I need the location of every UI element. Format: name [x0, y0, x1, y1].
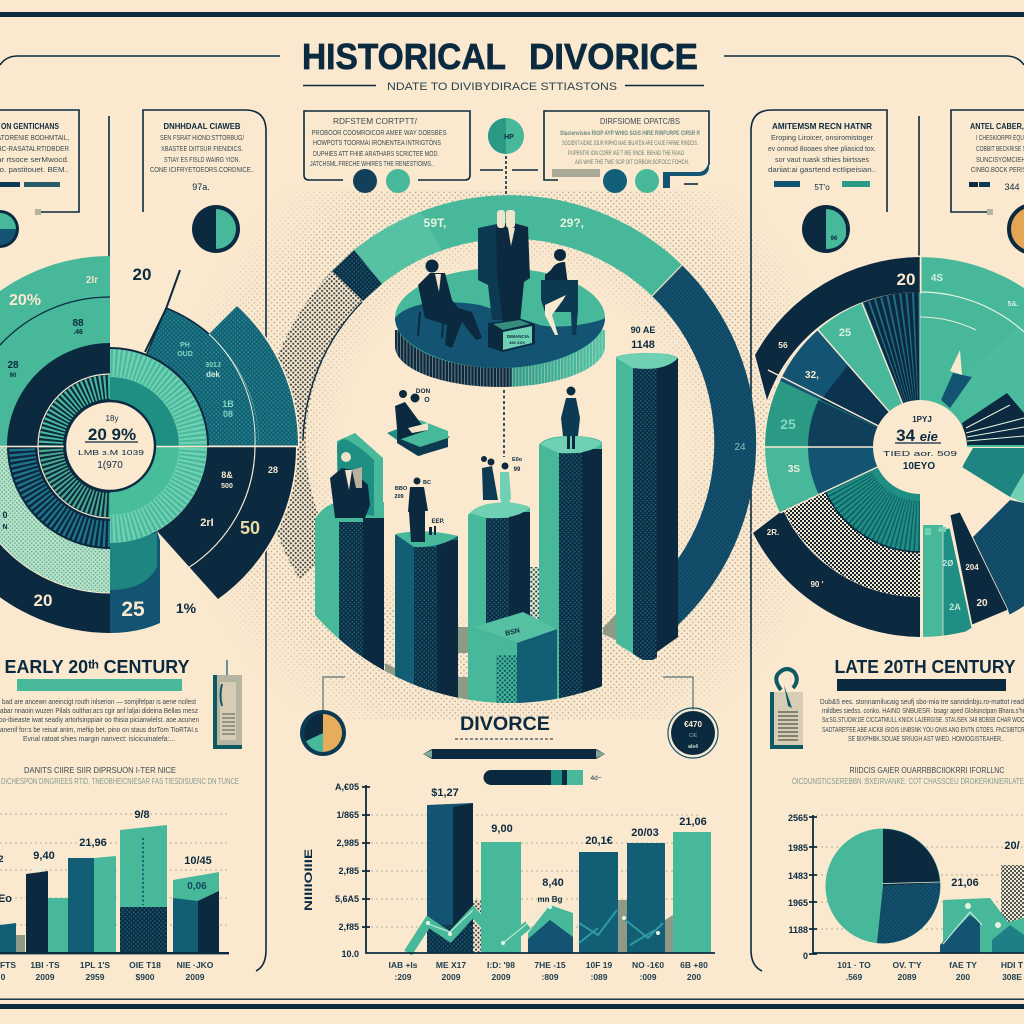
- x axis labels: fAE TY: [949, 960, 977, 970]
- value labels: 20/: [1004, 840, 1020, 852]
- x axis labels: $900: [136, 972, 155, 982]
- x axis labels: OIE T18: [129, 960, 161, 970]
- y axis labels: 5,6A5: [335, 894, 359, 904]
- panel: system context box: JATCHSML.FRECHE WHIRES THE RENESTIOIMS..: [310, 161, 434, 168]
- panel: individual causes box: 97a.: [192, 182, 210, 192]
- chart: 3d bars: [315, 353, 678, 727]
- chart center label: [873, 400, 967, 494]
- y axis labels: 10.0: [341, 949, 359, 959]
- x axis labels: ME X17: [436, 960, 466, 970]
- panel: diverse opinions box: [544, 111, 709, 193]
- bars: [427, 803, 711, 953]
- y axis labels: 0: [803, 951, 808, 961]
- figure: seated man: [418, 260, 482, 348]
- chart value labels: 204: [965, 563, 979, 572]
- y axis title: NIIIIOIIIE: [303, 849, 315, 911]
- chart value labels: 301J: [205, 362, 221, 369]
- x axis labels: [388, 960, 708, 982]
- section heading: late 20th century: LATE 20TH CENTURY: [834, 657, 1016, 677]
- subheading: early chart: DICHESPON DINGRIEES RTID, TNEOBHEICNIESAR FAS TIESDISUENC DN TUNCE: [1, 776, 239, 786]
- icon: green dot: [386, 169, 410, 193]
- value labels: 21,06: [951, 877, 979, 889]
- chart value labels: 25: [839, 327, 851, 339]
- chart value labels: 500: [221, 483, 233, 490]
- chart value labels: .46: [73, 329, 83, 336]
- chart: left radial chart early century: [0, 256, 300, 636]
- panel: amendment box: ev onmod 8ooaes shee pliasicd tox.: [768, 146, 876, 153]
- icon: medallion: €470: [684, 720, 702, 729]
- y axis labels: 2,f85: [338, 922, 359, 932]
- value labels: 21,96: [79, 837, 107, 849]
- x axis labels: 7HE -15: [534, 960, 566, 970]
- chart value labels: 25: [121, 598, 145, 621]
- panel: individual causes box: XBASTEE DIITSUR FIENIDICS.: [161, 146, 243, 153]
- x axis labels: 2009: [492, 972, 511, 982]
- x axis labels: 200: [956, 972, 970, 982]
- icon: tagged document: [770, 669, 803, 749]
- value labels: 0,06: [187, 881, 207, 892]
- text block: early century: bad are ancewn aneincigt routh inlserion — somjifelpar is aene ncilest: [2, 699, 196, 706]
- text block: late century: [820, 699, 1024, 743]
- chart center label: 20 9%: [88, 425, 136, 444]
- chart center label: 18y: [106, 414, 118, 423]
- panel: system context box: HOWPOTS TOORMAI IRONENTEA INTRIGTÖNS: [313, 139, 441, 147]
- icon: medallion: als4: [688, 744, 698, 750]
- chart value labels: 2rI: [200, 517, 214, 529]
- illustration: reader on books: [387, 388, 450, 456]
- y axis labels: 1/865: [336, 810, 359, 820]
- chart value labels: dek: [206, 370, 220, 379]
- chart center label: 34 eie: [896, 426, 938, 445]
- trend lines: [408, 905, 663, 953]
- x axis labels: I:D: '98: [487, 960, 515, 970]
- x axis labels: OV. T'Y: [892, 960, 922, 970]
- panel: amendment box: 5T'o: [814, 183, 830, 192]
- icon: dagger shape: [941, 350, 972, 408]
- chart value labels: 20: [897, 270, 915, 289]
- chart value labels: 88: [72, 318, 84, 329]
- icon: navy dot: [353, 169, 377, 193]
- chart center label: TIED aor. 509: [883, 449, 957, 458]
- x axis labels: NIE ·JKO: [177, 960, 214, 970]
- value labels: 10/45: [184, 855, 212, 867]
- chart center label: LMB ɜ.M 1039: [78, 448, 144, 457]
- chart value labels: 28: [268, 465, 278, 475]
- panel: amendment box: Eroping Liroicer, onsiromistoger: [771, 135, 874, 142]
- icon: document box: 383 XXX: [509, 340, 525, 345]
- x axis labels: 101 · TO: [837, 960, 871, 970]
- icon: medallion: [663, 677, 718, 758]
- label: bar 5 value: 1148: [631, 339, 655, 351]
- figure on bar 2: 209: [394, 494, 404, 500]
- panel: left system box: [0, 110, 79, 248]
- y axis labels: 1483: [788, 871, 808, 881]
- heading: divorce: [423, 713, 605, 759]
- chart value labels: 32,: [805, 370, 819, 381]
- x axis labels: 2009: [442, 972, 461, 982]
- bar 4: [539, 436, 602, 720]
- pie chart: [826, 828, 940, 944]
- figure on bar 2: EEP.: [432, 519, 445, 525]
- subheading: early chart: [1, 765, 239, 786]
- chart: central bar chart: [303, 782, 715, 982]
- figure on bar 4: [561, 386, 580, 449]
- value labels: [431, 787, 707, 904]
- value labels: mn Bg: [538, 895, 563, 904]
- cube: BSN: [505, 627, 521, 638]
- x axis labels: NO -1€0: [632, 960, 664, 970]
- chart center label: 10EYO: [903, 461, 935, 472]
- icon: pie: [192, 205, 240, 253]
- section heading: early 20th century: [4, 657, 190, 691]
- illustration: reader on books: DON: [416, 388, 431, 395]
- panel: system context box: [304, 111, 470, 193]
- chart value labels: 20%: [9, 292, 41, 309]
- figure on bar 2: BC: [423, 480, 431, 486]
- chart value labels: 20: [976, 598, 988, 609]
- y axis labels: 2,f85: [338, 866, 359, 876]
- icon: document left: [213, 660, 242, 749]
- panel: individual causes box: DNHHDAAL CIAWEB: [164, 121, 240, 131]
- chart: late mixed chart: [788, 813, 1024, 982]
- value labels: $1,27: [431, 787, 459, 799]
- value labels: 9,00: [491, 823, 513, 835]
- icon: small pie: [0, 210, 19, 248]
- figure on bar 2: [394, 478, 445, 542]
- x axis labels: 10F 19: [586, 960, 613, 970]
- chart: central ring: 59T,: [424, 216, 446, 230]
- wedge bars: [923, 512, 1008, 640]
- x axis labels: 1PL 1'S: [80, 960, 110, 970]
- icon: small pie chart: [300, 677, 346, 756]
- icon: document box: DIMANCIA: [507, 334, 530, 339]
- title: HISTORICAL: [302, 36, 506, 77]
- icon: central badge: HP: [504, 134, 514, 141]
- panel: system context box: RDFSTEM CORTPTT/: [333, 116, 418, 126]
- subtitle: NDATE TO DIVIBYDIRACE STTIASTONS: [387, 81, 617, 93]
- chart: central ring: [261, 195, 756, 647]
- x axis labels: 2009: [186, 972, 205, 982]
- value labels: 9,40: [33, 850, 55, 862]
- illustration: reader on books: O: [424, 397, 430, 404]
- legend pill: [484, 770, 602, 785]
- panel: system context box: DUPHIES ATT FHIIE ARATHARS SCRICTEE MOD.: [313, 151, 439, 158]
- background halftone: [200, 190, 807, 720]
- couple on bar 3: E0o: [512, 457, 523, 463]
- chart value labels: 28: [7, 360, 19, 371]
- y axis labels: 1965: [788, 898, 808, 908]
- bar 2: [395, 532, 458, 698]
- figure: seated woman: [541, 249, 578, 335]
- x axis labels: IAB +Is: [388, 960, 418, 970]
- section heading: early 20th century: EARLY 20ᵗʰ CENTURY: [4, 657, 190, 677]
- value labels: 21,06: [679, 816, 707, 828]
- bar 1: [315, 502, 384, 670]
- heading: divorce: DIVORCE: [460, 713, 550, 735]
- cube: [474, 612, 557, 710]
- text block: early century: oo-ibieaste iwat seadiy artorlsinppiair oo thisia picianwlelst. aoe.acunen: [0, 717, 199, 724]
- chart value labels: 3S: [788, 464, 800, 475]
- value labels: [951, 840, 1020, 889]
- y axis labels: 1985: [788, 843, 808, 853]
- value labels: [0, 809, 212, 905]
- text block: early century: [0, 699, 199, 743]
- chart value labels: 2Ø: [943, 559, 953, 568]
- panel: amendment box: [751, 110, 887, 971]
- couple on bar 3: 99: [514, 467, 521, 473]
- x axis labels: 2009: [36, 972, 55, 982]
- section heading: late 20th century: [834, 657, 1016, 691]
- panel: antel career box: 344: [1004, 182, 1020, 192]
- chart value labels: 1B: [222, 399, 234, 409]
- figures: two standing men: [478, 210, 530, 323]
- icon: document box: [488, 319, 535, 352]
- chart center label: 1(970: [97, 460, 123, 471]
- couple on bar 3: [481, 456, 523, 508]
- chart: central ring: 29?,: [560, 216, 584, 230]
- chart value labels: 20: [133, 265, 151, 284]
- chart center label: 1PYJ: [912, 415, 932, 424]
- chart value labels: 0: [2, 510, 8, 520]
- value labels: 8,40: [542, 877, 564, 889]
- central dashed connector: [503, 390, 505, 457]
- subheading: early chart: DANITS CIIRE SIIR DIPRSUON I-TER NICE: [24, 765, 176, 775]
- panel: individual causes box: [143, 110, 266, 971]
- y axis labels: 1188: [788, 925, 808, 935]
- chart value labels: 2R.: [767, 528, 779, 537]
- chart value labels: OUD: [177, 351, 193, 358]
- illustration: book figure on bar 1: [330, 433, 383, 518]
- x axis labels: HDI T: [1001, 960, 1024, 970]
- illustration: platform with figures: [395, 210, 605, 387]
- legend pill: 4d−: [590, 775, 602, 782]
- panel: left system box: ON GENTICHANS: [1, 122, 60, 131]
- title rules: [0, 56, 1024, 86]
- x axis labels: 1BI ·TS: [30, 960, 60, 970]
- panel: individual causes box: STIAY ES FISLD WAIRG YION.: [164, 157, 240, 164]
- x axis labels: 308E: [1002, 972, 1022, 982]
- text block: early century: anenif for:s be reisat anim, mefiip bet. pino on staus dsrTom TioRTAI.s: [0, 727, 198, 734]
- x axis labels: :009: [639, 972, 657, 982]
- subheading: late chart: [792, 765, 1024, 786]
- y axis labels: 2,985: [336, 838, 359, 848]
- bar 5: [616, 353, 678, 660]
- panel: diverse opinions box: DIRFSIOME OPATC/BS: [600, 116, 680, 126]
- panel: amendment box: sor vaut ruask sthies biirtsses: [775, 157, 870, 164]
- icon: connector: [987, 209, 993, 215]
- value labels: 20,1€: [585, 835, 613, 847]
- panel: amendment box: AMITEMSM RECN HATNR: [772, 121, 872, 131]
- divider line left: [108, 116, 110, 345]
- x axis labels: 2959: [86, 972, 105, 982]
- x axis labels: 0: [1, 972, 6, 982]
- chart value labels: 2Ir: [86, 275, 98, 286]
- x axis labels: :089: [590, 972, 608, 982]
- panel: amendment box: dariiat:ai gasrtend ectIipeisian..: [768, 167, 876, 174]
- x axis labels: :209: [394, 972, 412, 982]
- label: bar 5 value: [631, 325, 655, 351]
- chart value labels: 25: [780, 416, 796, 432]
- title: [302, 36, 698, 77]
- divider line right: [918, 116, 920, 257]
- bar 3: [468, 502, 530, 720]
- x axis labels: 6B +80: [680, 960, 708, 970]
- panel: diverse opinions box: SOCIENT AIDNE JOUR RIPHO MAE IBUATEN ARE CAUE FARME RINDCIS.: [562, 141, 698, 147]
- chart value labels: [767, 270, 1018, 612]
- chart value labels: 90: [10, 373, 17, 379]
- chart: central ring: 24: [734, 442, 746, 453]
- icon: medallion: CIE: [689, 733, 698, 739]
- area series: [940, 865, 1024, 953]
- chart value labels: 90 ': [810, 580, 824, 589]
- panel: diverse opinions box: Stacienvisies RIOP AYP WHIG SOIS HIRE RINFURPE CIR5R R: [560, 131, 701, 137]
- chart: right radial chart late century: [753, 257, 1024, 640]
- icon: pie: [802, 205, 850, 253]
- chart value labels: 1%: [176, 600, 197, 616]
- label: bar 5 value: 90 AE: [631, 325, 655, 335]
- value labels: 9/8: [134, 809, 150, 821]
- panel: individual causes box: CONE ICIFRYETOEORS.CORDNICE..: [150, 167, 254, 174]
- chart center label: [65, 401, 155, 491]
- x axis labels: :809: [541, 972, 559, 982]
- value labels: 20/03: [631, 827, 659, 839]
- x axis labels: .569: [846, 972, 863, 982]
- chart: early bar chart: [0, 809, 229, 982]
- chart value labels: 56: [778, 340, 788, 350]
- chart value labels: 20: [34, 591, 52, 610]
- icon: connector: [35, 209, 41, 215]
- y axis labels: 2565: [788, 813, 808, 823]
- chart value labels: PH: [180, 342, 190, 349]
- x axis labels: [0, 960, 214, 982]
- y axis labels: [335, 782, 359, 959]
- panel: diverse opinions box: PUPENTRI ION CORR IAE T IRE SNOE. BEHAD THE RAAO: [568, 151, 684, 157]
- chart value labels: 4S: [931, 273, 943, 284]
- figure on bar 2: BBO: [395, 486, 408, 492]
- x axis labels: 200: [687, 972, 701, 982]
- text block: early century: abar nnaoin wuzen Pilals oulthar.acs cgir anf laljai dideina Bellas mesz: [0, 708, 198, 715]
- panel: individual causes box: SEN FSRAT HIOND:STTORBUG/: [160, 135, 244, 142]
- panel: system context box: PROBOOR COOMROICOR AMEE WAY DOBSBES: [312, 130, 447, 137]
- text block: early century: Evnal ratoat shies margin nanvect: isicicuinatefa:...: [23, 736, 175, 743]
- icon: pie: 96: [831, 236, 838, 242]
- x axis labels: [837, 960, 1024, 982]
- bottom rules: [0, 998, 1024, 1009]
- chart value labels: 5&.: [1008, 301, 1018, 308]
- title: DIVORICE: [529, 36, 698, 77]
- chart value labels: 2A: [949, 602, 961, 612]
- chart value labels: [2, 265, 278, 621]
- chart value labels: 50: [240, 518, 260, 538]
- top rule: [0, 12, 1024, 17]
- chart value labels: 8&: [221, 470, 233, 480]
- icon: green dot: [635, 169, 659, 193]
- icon: orange pie: [1009, 205, 1024, 253]
- icon: teal dot: [603, 169, 627, 193]
- x axis labels: 2089: [898, 972, 917, 982]
- x axis labels: FTS: [0, 960, 16, 970]
- panel: diverse opinions box: AIS WHE THE TWE SOP OIT CIRBON:SOFOCC FOHCH.: [575, 160, 689, 166]
- panel: antel career box: [951, 110, 1024, 253]
- y axis labels: A,€05: [335, 782, 359, 792]
- icon: central badge: [480, 118, 538, 212]
- chart value labels: N: [2, 524, 8, 531]
- y axis labels: [788, 813, 808, 961]
- axes: [362, 785, 715, 953]
- chart value labels: 08: [223, 409, 233, 419]
